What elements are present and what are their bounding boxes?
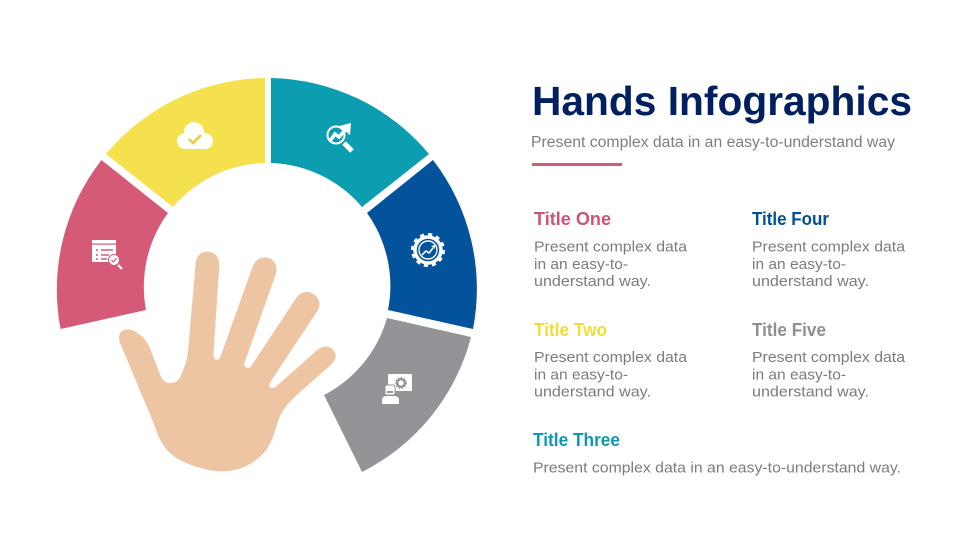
segment: teal with analytics icon: [271, 78, 429, 207]
icon: magnifier with rising arrow: [328, 123, 352, 151]
text block: title one: Present complex data: [534, 238, 688, 256]
text block: title five: Title Five: [752, 320, 826, 340]
heading: Hands Infographics: [532, 78, 912, 124]
text block: title three: Title Three: [533, 430, 620, 450]
icon: presenter with gear board: [382, 374, 412, 404]
text block: title two: understand way.: [534, 384, 651, 400]
accent rule: [532, 163, 622, 166]
text block: title five: Present complex data: [752, 349, 906, 366]
hand: [119, 252, 336, 471]
text block: title one: [534, 209, 688, 290]
text block: title three: Present complex data in an easy-to-understand way.: [533, 460, 901, 476]
subtitle: Present complex data in an easy-to-understand way: [531, 134, 895, 151]
icon: cloud with check: [177, 122, 213, 149]
text block: title two: [534, 320, 688, 400]
text block: title four: Present complex data: [752, 238, 906, 256]
text block: title two: Title Two: [534, 320, 607, 340]
text block: title two: in an easy-to-: [534, 366, 628, 384]
text block: title five: [752, 320, 906, 400]
hand ring diagram: [57, 78, 477, 472]
text block: title four: in an easy-to-: [752, 256, 846, 273]
segment: blue with gear icon: [367, 160, 477, 329]
text block: title four: Title Four: [752, 209, 829, 229]
text block: title three: [533, 430, 901, 476]
segment: yellow with cloud icon: [106, 78, 265, 207]
segment: red with checklist icon: [57, 160, 168, 329]
text block: title one: Title One: [534, 209, 611, 229]
text block: title one: in an easy-to-: [534, 256, 628, 273]
segment: grey with presenter icon: [324, 318, 471, 472]
text block: title two: Present complex data: [534, 349, 688, 366]
icon: checklist and magnifier: [92, 240, 122, 269]
text block: title four: understand way.: [752, 273, 869, 290]
text block: title five: understand way.: [752, 384, 869, 400]
text block: title four: [752, 209, 906, 290]
text block: title one: understand way.: [534, 273, 651, 290]
text block: title five: in an easy-to-: [752, 366, 846, 384]
icon: gear with chart: [413, 235, 443, 265]
